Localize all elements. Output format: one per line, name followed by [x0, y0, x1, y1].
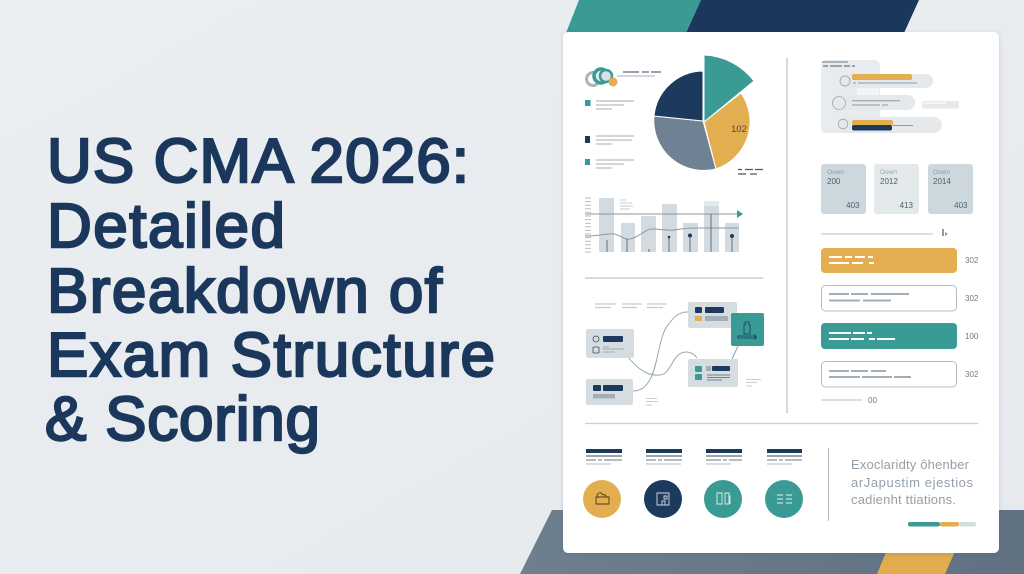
icon: list lines [777, 495, 792, 503]
decorative shape: navy top band [686, 0, 919, 33]
feature column 3 [704, 449, 742, 518]
stat card 3 [928, 164, 973, 214]
flow diagram [586, 302, 764, 405]
legend item: teal [585, 100, 634, 109]
icon: columns [717, 493, 730, 504]
pie chart [654, 55, 754, 171]
title: Breakdown of [47, 257, 443, 326]
flow node: teal icon tile [731, 313, 764, 346]
feature column 1 [583, 449, 622, 518]
stat card 1: Oown [827, 169, 844, 176]
decorative shape: gold bottom band [877, 540, 960, 574]
progress bar [908, 522, 976, 526]
flow node C [688, 302, 737, 328]
legend item: navy [585, 136, 634, 144]
stat card 2: 2012 [880, 177, 898, 186]
title: US CMA 2026: [47, 127, 469, 196]
stat card 3: Oown [933, 169, 950, 176]
feature column 4 [765, 449, 803, 518]
rows footer: 00 [868, 396, 877, 405]
row: outline two [822, 362, 979, 387]
title [45, 127, 495, 454]
row: teal [821, 323, 979, 349]
bar chart [585, 198, 743, 252]
stat card 2: 413 [900, 201, 914, 210]
note text: Exoclaridty ôhenber [851, 457, 970, 472]
flow node D [688, 359, 738, 387]
row: outline one [822, 286, 979, 311]
rows footer [821, 396, 877, 405]
row: outline two: 302 [965, 370, 979, 379]
note text: arJapustim ejestios [851, 475, 974, 490]
pie footnote dashes [738, 170, 763, 174]
stat card 2 [874, 164, 919, 214]
stat card 1: 200 [827, 177, 841, 186]
stat card 2: Oown [880, 169, 897, 176]
stat card 3: 2014 [933, 177, 951, 186]
title: Exam Structure [47, 321, 495, 390]
icon: gear cluster [586, 69, 661, 86]
flow node B [586, 379, 633, 405]
row: gold: 302 [965, 256, 979, 265]
row: outline one: 302 [965, 294, 979, 303]
icon: bag [596, 493, 609, 504]
timeline panel [821, 60, 959, 133]
icon: document [657, 493, 669, 505]
flow node A [586, 329, 634, 358]
note text: cadienht ttiations. [851, 492, 956, 507]
stat card 1 [821, 164, 866, 214]
row: teal: 100 [965, 332, 979, 341]
note text [851, 457, 974, 507]
title: & Scoring [45, 385, 320, 454]
row: gold [821, 248, 979, 273]
decorative shape: teal top band [566, 0, 701, 33]
title: Detailed [47, 192, 285, 261]
feature column 2 [644, 449, 682, 518]
legend item: teal lower [585, 159, 634, 168]
stat card 1: 403 [846, 201, 860, 210]
icon: small marker [942, 229, 948, 236]
stat card 3: 403 [954, 201, 968, 210]
panel: report card [563, 32, 999, 553]
pie chart: 102 [731, 124, 747, 135]
decorative shape: slate bottom band [520, 510, 1024, 574]
